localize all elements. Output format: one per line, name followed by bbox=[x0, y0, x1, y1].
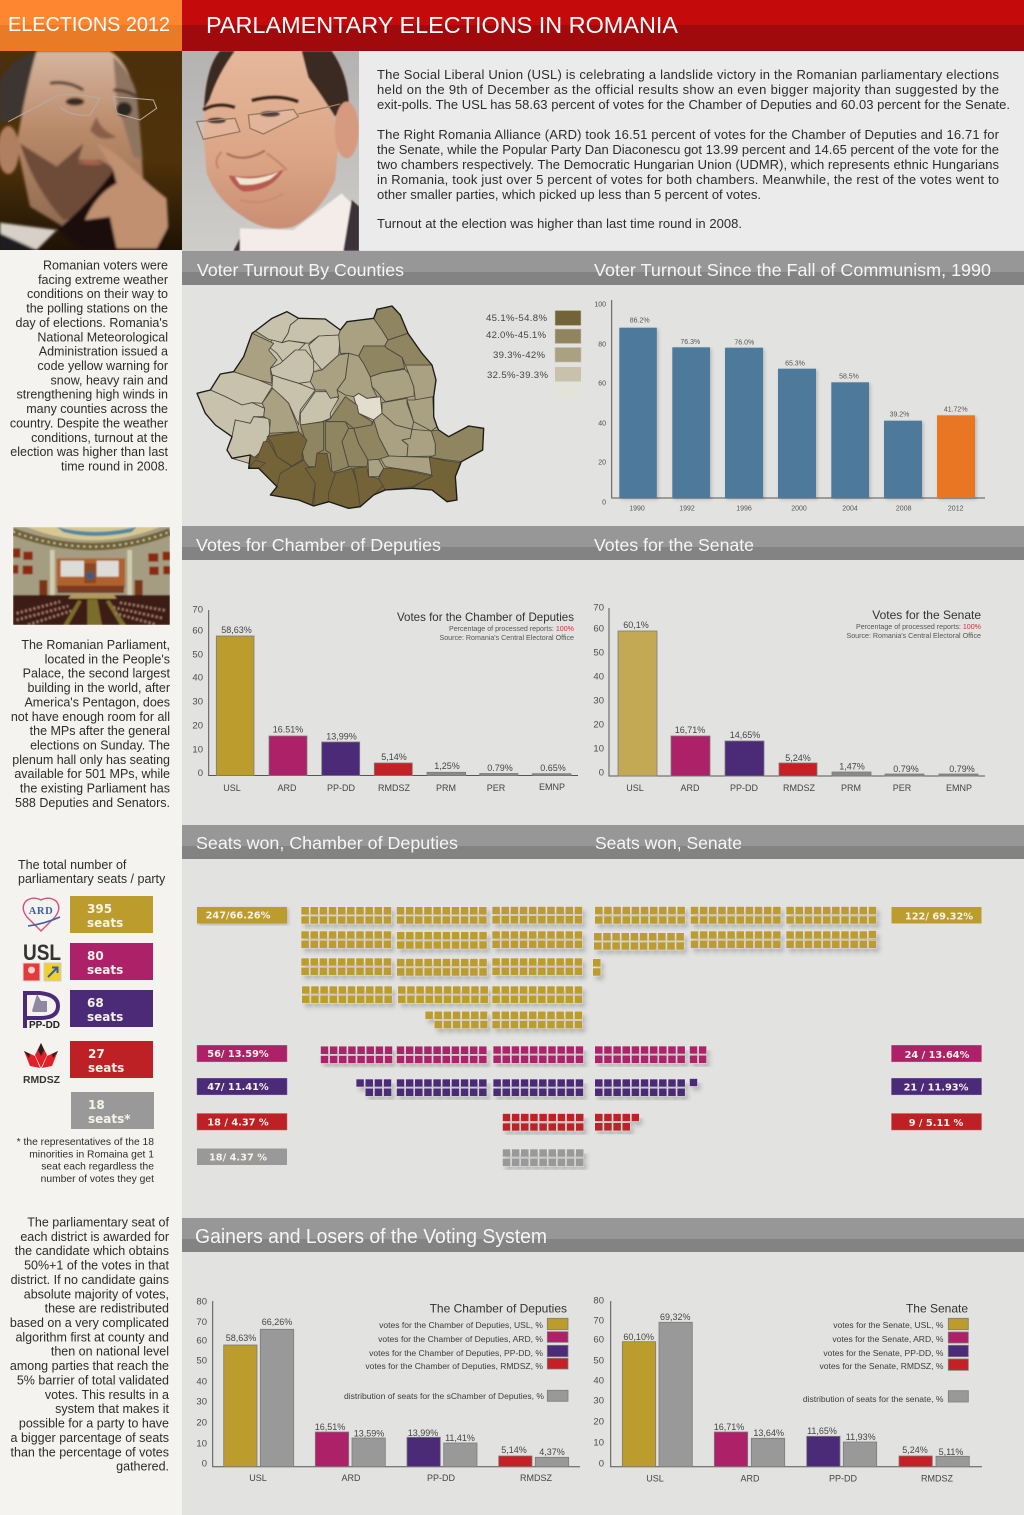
y axis labels: 0 bbox=[599, 768, 604, 778]
party labels: EMNP bbox=[946, 783, 972, 793]
legend: votes for the Chamber of Deputies, USL, % bbox=[379, 1320, 543, 1330]
y axis labels: 40 bbox=[598, 420, 606, 428]
value labels: 13,99% bbox=[408, 1428, 438, 1438]
section band: seats: Seats won, Chamber of Deputies bbox=[196, 833, 458, 853]
label: USL chamber seats bbox=[197, 907, 287, 924]
label: PP-DD chamber seats bbox=[197, 1078, 287, 1095]
y axis labels: 0 bbox=[202, 1458, 207, 1470]
value labels: 76.0% bbox=[734, 340, 754, 346]
intro paragraph 3: Turnout at the election was higher than last time round in 2008. bbox=[377, 216, 742, 231]
seats: RMDSZ senate bbox=[595, 1118, 639, 1127]
intro paragraph 1: exit-polls. The USL has 58.63 percent of votes for the Chamber of Deputies and 60.03 percent for the Senate. bbox=[377, 97, 1010, 112]
party labels: PP-DD bbox=[427, 1473, 455, 1483]
left text: voting system: votes. This results in a bbox=[45, 1388, 169, 1402]
value labels: 5,24% bbox=[785, 753, 811, 763]
year labels: 1990 bbox=[629, 506, 645, 512]
seats: PP-DD chamber bbox=[356, 1083, 583, 1092]
left text: weather: facing extreme weather bbox=[38, 273, 168, 287]
left text: parliament: America's Pentagon, does bbox=[24, 695, 170, 709]
value labels: 39.2% bbox=[890, 412, 909, 418]
party labels: ARD bbox=[341, 1473, 361, 1483]
section band: votes: Votes for Chamber of Deputies bbox=[196, 535, 441, 555]
party labels: ARD bbox=[680, 783, 700, 793]
y axis labels: 10 bbox=[593, 1438, 604, 1448]
label: PP-DD senate seats bbox=[892, 1078, 982, 1095]
value labels: 5,11% bbox=[939, 1447, 963, 1457]
left text: voting system: based on a very complicated bbox=[10, 1316, 169, 1330]
value labels: 13,64% bbox=[753, 1428, 784, 1438]
value labels: 0.65% bbox=[540, 763, 566, 773]
y axis labels: 80 bbox=[598, 342, 606, 348]
intro paragraph 1: held on the 9th of December as the official results show an even bigger majority than suggested by the bbox=[377, 82, 999, 97]
legend: distribution of seats for the sChamber of Deputies, % bbox=[344, 1391, 544, 1401]
party labels: ARD bbox=[277, 783, 297, 793]
left text: parliament: 588 Deputies and Senators. bbox=[15, 796, 170, 810]
party labels: RMDSZ bbox=[921, 1474, 953, 1484]
party row: USL: 80 bbox=[87, 949, 104, 963]
party labels: RMDSZ bbox=[378, 783, 410, 793]
bars bbox=[619, 328, 975, 498]
left text: weather: election was higher than last bbox=[10, 445, 169, 459]
photo: politician with hand on chin bbox=[0, 51, 182, 250]
intro paragraph 2 bbox=[377, 127, 1000, 202]
year labels: 2000 bbox=[791, 506, 807, 512]
icon: USL logo: USL bbox=[23, 940, 61, 965]
left text: parliament: Palace, the second largest bbox=[23, 667, 171, 681]
footnote: minorities: minorities in Romaina get 1 bbox=[29, 1149, 154, 1160]
value labels: 0.79% bbox=[893, 764, 919, 774]
y axis labels: 70 bbox=[593, 1316, 604, 1326]
seats: minorities chamber bbox=[503, 1153, 584, 1162]
header: main title: PARLAMENTARY ELECTIONS IN ROMANIA bbox=[206, 12, 678, 38]
left text: voting system: The parliamentary seat of bbox=[27, 1216, 170, 1230]
label: minorities chamber seats: 18/ 4.37 % bbox=[209, 1152, 267, 1164]
intro paragraph 2: in Romania, took just over 5 percent of votes for both chambers. Meanwhile, the rest of the votes went to bbox=[377, 172, 999, 187]
value labels: 16.51% bbox=[273, 724, 303, 734]
y axis labels bbox=[196, 1296, 207, 1470]
y axis labels: 50 bbox=[192, 650, 203, 660]
y axis labels: 30 bbox=[593, 696, 604, 706]
map legend: 45.1%-54.8% bbox=[486, 313, 547, 324]
legend: votes for the Chamber of Deputies, PP-DD, % bbox=[369, 1348, 543, 1358]
left text: voting system: absolute majority of votes, bbox=[24, 1287, 169, 1301]
y axis labels: 40 bbox=[196, 1376, 207, 1388]
intro paragraph 2: two chambers respectively. The Democratic Hungarian Union (UDMR), which represents ethnic Hungarians bbox=[377, 157, 1000, 172]
seats: ARD senate bbox=[595, 1050, 706, 1059]
section band: votes bbox=[182, 526, 1024, 560]
left text: voting system: 5% barrier of total validated bbox=[17, 1373, 169, 1387]
left text: weather: time round in 2008. bbox=[61, 460, 168, 474]
left text: parliament: the MPs after the general bbox=[30, 724, 170, 738]
y axis labels: 10 bbox=[593, 744, 604, 754]
section band: turnout: Voter Turnout Since the Fall of Communism, 1990 bbox=[594, 260, 991, 280]
legend: votes for the Chamber of Deputies, ARD, % bbox=[378, 1334, 543, 1344]
y axis labels: 0 bbox=[602, 500, 606, 506]
footnote: minorities: * the representatives of the 18 bbox=[17, 1137, 154, 1148]
legend: The Chamber of Deputies bbox=[430, 1302, 567, 1316]
footnote: minorities: number of votes they get bbox=[41, 1174, 154, 1185]
y axis labels: 20 bbox=[593, 1416, 604, 1428]
y axis labels: 20 bbox=[192, 720, 203, 732]
value labels: 86.2% bbox=[630, 318, 650, 324]
bar chart: turnout since 1990 bbox=[594, 300, 985, 512]
chart caption bbox=[397, 610, 575, 642]
value labels: 1,47% bbox=[839, 762, 865, 772]
y axis labels: 20 bbox=[598, 460, 606, 466]
year labels: 2012 bbox=[948, 506, 964, 512]
left text: weather: Romanian voters were bbox=[43, 258, 168, 272]
year labels: 1996 bbox=[736, 506, 752, 512]
value labels: 4,37% bbox=[539, 1447, 565, 1457]
chart caption: Source: Romania's Central Electoral Office bbox=[440, 634, 574, 642]
section band: seats: Seats won, Senate bbox=[595, 833, 742, 853]
left text: voting system: system that makes it bbox=[55, 1402, 170, 1416]
legend: votes for the Senate, USL, % bbox=[833, 1320, 944, 1330]
seats: RMDSZ chamber bbox=[503, 1118, 584, 1127]
map legend: 39.3%-42% bbox=[493, 350, 545, 361]
left text: weather: code yellow warning for bbox=[37, 359, 168, 373]
legend bbox=[344, 1302, 568, 1401]
left text: weather: Administration issued a bbox=[39, 345, 168, 359]
section band: seats bbox=[182, 825, 1024, 859]
y axis labels: 10 bbox=[192, 744, 203, 756]
map: voter turnout by counties bbox=[197, 306, 484, 508]
chart caption: Percentage of processed reports: 100% bbox=[856, 623, 982, 631]
left text: voting system: a bigger parcentage of seats bbox=[11, 1431, 169, 1445]
value labels: 65.3% bbox=[785, 360, 805, 368]
left text: parliament: the existing Parliament has bbox=[20, 782, 170, 796]
legend: votes for the Senate, ARD, % bbox=[832, 1334, 944, 1344]
label: RMDSZ chamber seats: 18 / 4.37 % bbox=[207, 1118, 269, 1128]
y axis labels: 40 bbox=[593, 1376, 604, 1386]
party labels: PRM bbox=[841, 783, 861, 793]
value labels: 11,93% bbox=[846, 1432, 876, 1442]
bar chart: votes for chamber of deputies bbox=[192, 604, 578, 793]
legend bbox=[803, 1302, 968, 1404]
party labels: PP-DD bbox=[327, 783, 355, 793]
value labels bbox=[221, 625, 566, 773]
party labels bbox=[646, 1474, 953, 1484]
bars bbox=[216, 636, 571, 776]
intro paragraph 1 bbox=[377, 67, 1010, 112]
left text: weather: snow, heavy rain and bbox=[51, 373, 168, 387]
left text: weather: country. Despite the weather bbox=[10, 416, 168, 430]
value labels: 16,51% bbox=[315, 1422, 345, 1432]
icon: RMDSZ tulip logo: RMDSZ bbox=[23, 1075, 60, 1086]
value labels: 76.3% bbox=[680, 339, 700, 346]
party labels: RMDSZ bbox=[783, 783, 815, 793]
party row: RMDSZ: 27 bbox=[88, 1047, 105, 1061]
label: PP-DD chamber seats: 47/ 11.41% bbox=[207, 1082, 269, 1093]
photo: parliament plenum hall bbox=[13, 527, 170, 625]
bars bbox=[618, 631, 978, 776]
party labels bbox=[223, 782, 565, 793]
left text: voting system: the candidate which obtains bbox=[15, 1244, 169, 1258]
left heading: total seats: The total number of bbox=[18, 858, 127, 872]
party row: minorities: seats* bbox=[88, 1112, 131, 1126]
chart caption: Votes for the Senate bbox=[872, 608, 981, 622]
party row: USL: seats bbox=[87, 963, 123, 977]
value labels: 60,1% bbox=[623, 620, 649, 630]
y axis labels bbox=[593, 602, 604, 778]
value labels: 13,59% bbox=[354, 1428, 384, 1438]
value labels: 11,65% bbox=[807, 1426, 837, 1436]
map legend: 42.0%-45.1% bbox=[486, 330, 546, 341]
intro panel bbox=[359, 51, 1024, 250]
y axis labels: 70 bbox=[196, 1317, 207, 1328]
photo: smiling politician with glasses bbox=[182, 51, 359, 251]
y axis labels: 50 bbox=[593, 648, 604, 658]
y axis labels: 60 bbox=[196, 1336, 207, 1346]
chart caption bbox=[846, 608, 982, 640]
y axis labels: 50 bbox=[196, 1356, 207, 1366]
left text: voting system: these are redistributed bbox=[45, 1302, 169, 1316]
y axis labels: 60 bbox=[593, 624, 604, 634]
label: PP-DD senate seats: 21 / 11.93% bbox=[904, 1082, 969, 1094]
party labels: PP-DD bbox=[730, 783, 758, 793]
value labels: 5,24% bbox=[902, 1445, 928, 1455]
y axis labels: 60 bbox=[192, 626, 203, 636]
value labels bbox=[630, 318, 968, 418]
y axis labels: 20 bbox=[196, 1418, 207, 1428]
party row: minorities bbox=[71, 1092, 154, 1129]
bar chart: chamber votes versus seats bbox=[196, 1296, 580, 1483]
left text: weather: day of elections. Romania's bbox=[16, 316, 168, 330]
label: ARD chamber seats bbox=[197, 1045, 287, 1062]
value labels: 41.72% bbox=[944, 406, 968, 414]
y axis labels: 100 bbox=[594, 302, 606, 308]
value labels: 66,26% bbox=[262, 1317, 292, 1327]
y axis labels: 60 bbox=[593, 1334, 604, 1346]
party row: ARD bbox=[23, 896, 153, 933]
seats: ARD chamber bbox=[321, 1050, 583, 1060]
left text: voting system: gathered. bbox=[116, 1460, 169, 1474]
bar chart: votes for the senate bbox=[593, 602, 985, 793]
seats: USL chamber bbox=[301, 910, 582, 1025]
left text: voting system: algorithm first at county and bbox=[15, 1330, 169, 1344]
label: RMDSZ senate seats bbox=[892, 1114, 982, 1130]
value labels: 1,25% bbox=[434, 761, 460, 771]
value labels: 16,71% bbox=[714, 1422, 744, 1432]
party labels: USL bbox=[223, 783, 241, 793]
footnote: minorities: seat each regardless the bbox=[41, 1162, 154, 1173]
seats: USL senate bbox=[593, 911, 876, 972]
icon: ARD heart logo: ARD bbox=[29, 906, 53, 917]
left text: voting system: each district is awarded for bbox=[20, 1230, 169, 1244]
bars bbox=[224, 1329, 569, 1467]
year labels: 2008 bbox=[896, 506, 912, 512]
value labels: 13,99% bbox=[326, 732, 357, 742]
y axis labels: 0 bbox=[599, 1458, 604, 1470]
left heading: total seats: parliamentary seats / party bbox=[18, 872, 166, 886]
value labels: 60,10% bbox=[623, 1332, 654, 1342]
party row: RMDSZ: seats bbox=[88, 1061, 124, 1075]
party row: RMDSZ bbox=[23, 1041, 153, 1086]
value labels: 11,41% bbox=[445, 1433, 475, 1443]
party labels: USL bbox=[646, 1474, 664, 1484]
seats chart: chamber of deputies bbox=[197, 907, 584, 1165]
y axis labels: 50 bbox=[593, 1356, 604, 1366]
value labels bbox=[623, 1312, 963, 1457]
header: elections 2012: ELECTIONS 2012 bbox=[8, 14, 170, 36]
y axis labels: 40 bbox=[192, 672, 203, 684]
year labels bbox=[629, 506, 964, 512]
label: ARD chamber seats: 56/ 13.59% bbox=[207, 1049, 269, 1060]
value labels: 0.79% bbox=[949, 764, 975, 774]
left text: voting system: than the percentage of votes bbox=[11, 1445, 169, 1459]
left text: weather: strengthening high winds in bbox=[16, 388, 168, 402]
y axis labels: 80 bbox=[196, 1296, 207, 1308]
party row: PP-DD: 68 bbox=[87, 996, 104, 1010]
y axis labels: 20 bbox=[593, 720, 604, 730]
party row: ARD: seats bbox=[87, 916, 123, 930]
left text: parliament: building in the world, after bbox=[28, 681, 170, 695]
party labels bbox=[249, 1473, 552, 1483]
legend: votes for the Senate, PP-DD, % bbox=[823, 1348, 944, 1358]
left text: parliament: not have enough room for all bbox=[11, 710, 170, 724]
left text: weather: conditions on their way to bbox=[27, 287, 168, 301]
party labels: PRM bbox=[436, 783, 456, 793]
left text: voting system: district. If no candidate gains bbox=[11, 1273, 169, 1287]
label: ARD senate seats bbox=[892, 1045, 982, 1062]
chart caption: Percentage of processed reports: 100% bbox=[449, 625, 575, 633]
left text: weather: the polling stations on the bbox=[26, 302, 168, 316]
party row: PP-DD: seats bbox=[87, 1010, 123, 1024]
y axis labels: 70 bbox=[593, 602, 604, 614]
party labels: EMNP bbox=[539, 782, 565, 792]
left text: voting system: among parties that reach the bbox=[10, 1359, 169, 1373]
label: ARD senate seats: 24 / 13.64% bbox=[905, 1050, 970, 1061]
section band: gainers and losers: Gainers and Losers of the Voting System bbox=[195, 1226, 547, 1248]
y axis labels: 30 bbox=[593, 1396, 604, 1406]
party labels: RMDSZ bbox=[520, 1473, 552, 1483]
party labels: PER bbox=[893, 783, 912, 793]
legend: votes for the Chamber of Deputies, RMDSZ, % bbox=[365, 1361, 543, 1371]
left text: parliament: elections on Sunday. The bbox=[30, 739, 170, 753]
intro paragraph 2: The Right Romania Alliance (ARD) took 16.51 percent of votes for the Chamber of Deputies and 16.71 for bbox=[377, 127, 1000, 142]
legend: The Senate bbox=[906, 1302, 968, 1316]
legend: votes for the Senate, RMDSZ, % bbox=[820, 1361, 944, 1371]
party labels: USL bbox=[249, 1473, 267, 1483]
year labels: 1992 bbox=[679, 506, 695, 512]
intro paragraph 1: The Social Liberal Union (USL) is celebrating a landslide victory in the Romanian parliamentary elections bbox=[377, 67, 1000, 82]
value labels: 58,63% bbox=[221, 625, 252, 635]
left text: parliament: available for 501 MPs, while bbox=[14, 767, 170, 781]
label: RMDSZ chamber seats bbox=[197, 1114, 287, 1130]
header: main title bbox=[182, 0, 1024, 51]
header: elections 2012 bbox=[0, 0, 182, 51]
section band: turnout bbox=[182, 251, 1024, 285]
party labels: PER bbox=[487, 783, 506, 793]
party row: PP-DD bbox=[25, 990, 153, 1031]
value labels: 58,63% bbox=[226, 1333, 256, 1343]
y axis labels: 70 bbox=[192, 604, 203, 616]
seats: PP-DD senate bbox=[595, 1082, 697, 1092]
intro paragraph 2: the Senate, while the Popular Party Dan Diaconescu got 13.99 percent and 14.65 percent of the vote for the bbox=[377, 142, 999, 157]
party labels: USL bbox=[626, 783, 644, 793]
label: USL senate seats bbox=[892, 907, 982, 924]
label: USL chamber seats: 247/66.26% bbox=[206, 910, 271, 922]
value labels: 58.5% bbox=[839, 374, 859, 380]
label: RMDSZ senate seats: 9 / 5.11 % bbox=[909, 1118, 963, 1129]
bar chart: senate votes versus seats bbox=[593, 1296, 982, 1484]
value labels: 16,71% bbox=[675, 725, 705, 735]
section band: votes: Votes for the Senate bbox=[594, 535, 754, 555]
page background: left column bbox=[0, 0, 182, 1515]
bars bbox=[622, 1322, 969, 1467]
value labels: 5,14% bbox=[381, 752, 407, 762]
y axis labels: 30 bbox=[196, 1396, 207, 1408]
chart caption: Votes for the Chamber of Deputies bbox=[397, 610, 574, 624]
y axis labels: 40 bbox=[593, 672, 604, 682]
value labels: 69,32% bbox=[660, 1312, 691, 1322]
intro paragraph 2: other smaller parties, which picked up less than 5 percent of votes. bbox=[377, 187, 761, 202]
party labels: ARD bbox=[740, 1474, 760, 1484]
y axis labels bbox=[594, 302, 606, 506]
party row: ARD: 395 bbox=[87, 902, 112, 916]
y axis labels: 0 bbox=[198, 768, 203, 779]
section band: gainers and losers bbox=[182, 1218, 1024, 1252]
value labels: 5,14% bbox=[501, 1445, 527, 1455]
value labels bbox=[226, 1317, 565, 1457]
seats chart: senate bbox=[593, 907, 982, 1130]
left text: parliament: The Romanian Parliament, bbox=[21, 638, 170, 652]
y axis labels bbox=[593, 1296, 604, 1470]
y axis labels: 10 bbox=[196, 1438, 207, 1450]
left text: parliament: plenum hall only has seating bbox=[12, 753, 170, 767]
map legend: 32.5%-39.3% bbox=[487, 370, 548, 381]
party row: USL bbox=[23, 940, 153, 981]
left text: weather: National Meteorological bbox=[37, 330, 168, 344]
value labels: 14,65% bbox=[730, 730, 760, 740]
value labels: 0.79% bbox=[487, 763, 513, 773]
y axis labels bbox=[192, 604, 203, 779]
left text: voting system: possible for a party to have bbox=[19, 1417, 169, 1431]
chart caption: Source: Romania's Central Electoral Office bbox=[846, 632, 981, 640]
section band: turnout: Voter Turnout By Counties bbox=[197, 260, 404, 280]
legend: distribution of seats for the senate, % bbox=[803, 1394, 944, 1404]
party labels bbox=[626, 783, 972, 793]
left text: voting system: 50%+1 of the votes in that bbox=[24, 1259, 170, 1273]
left text: voting system: then on national level bbox=[51, 1345, 169, 1359]
y axis labels: 60 bbox=[598, 380, 606, 388]
left text: weather: many counties across the bbox=[26, 402, 168, 416]
value labels bbox=[623, 620, 975, 774]
icon: PP-DD logo: PP-DD bbox=[29, 1020, 60, 1031]
label: USL senate seats: 122/ 69.32% bbox=[905, 912, 973, 922]
left text: weather: conditions, turnout at the bbox=[31, 431, 168, 445]
y axis labels: 30 bbox=[192, 696, 203, 708]
map legend bbox=[486, 310, 581, 399]
year labels: 2004 bbox=[842, 506, 858, 512]
left text: parliament: located in the People's bbox=[45, 652, 170, 666]
y axis labels: 80 bbox=[593, 1296, 604, 1306]
party labels: PP-DD bbox=[829, 1474, 857, 1484]
party row: minorities: 18 bbox=[88, 1098, 105, 1112]
label: minorities chamber seats bbox=[197, 1148, 287, 1165]
page background: main area bbox=[182, 51, 1024, 1515]
